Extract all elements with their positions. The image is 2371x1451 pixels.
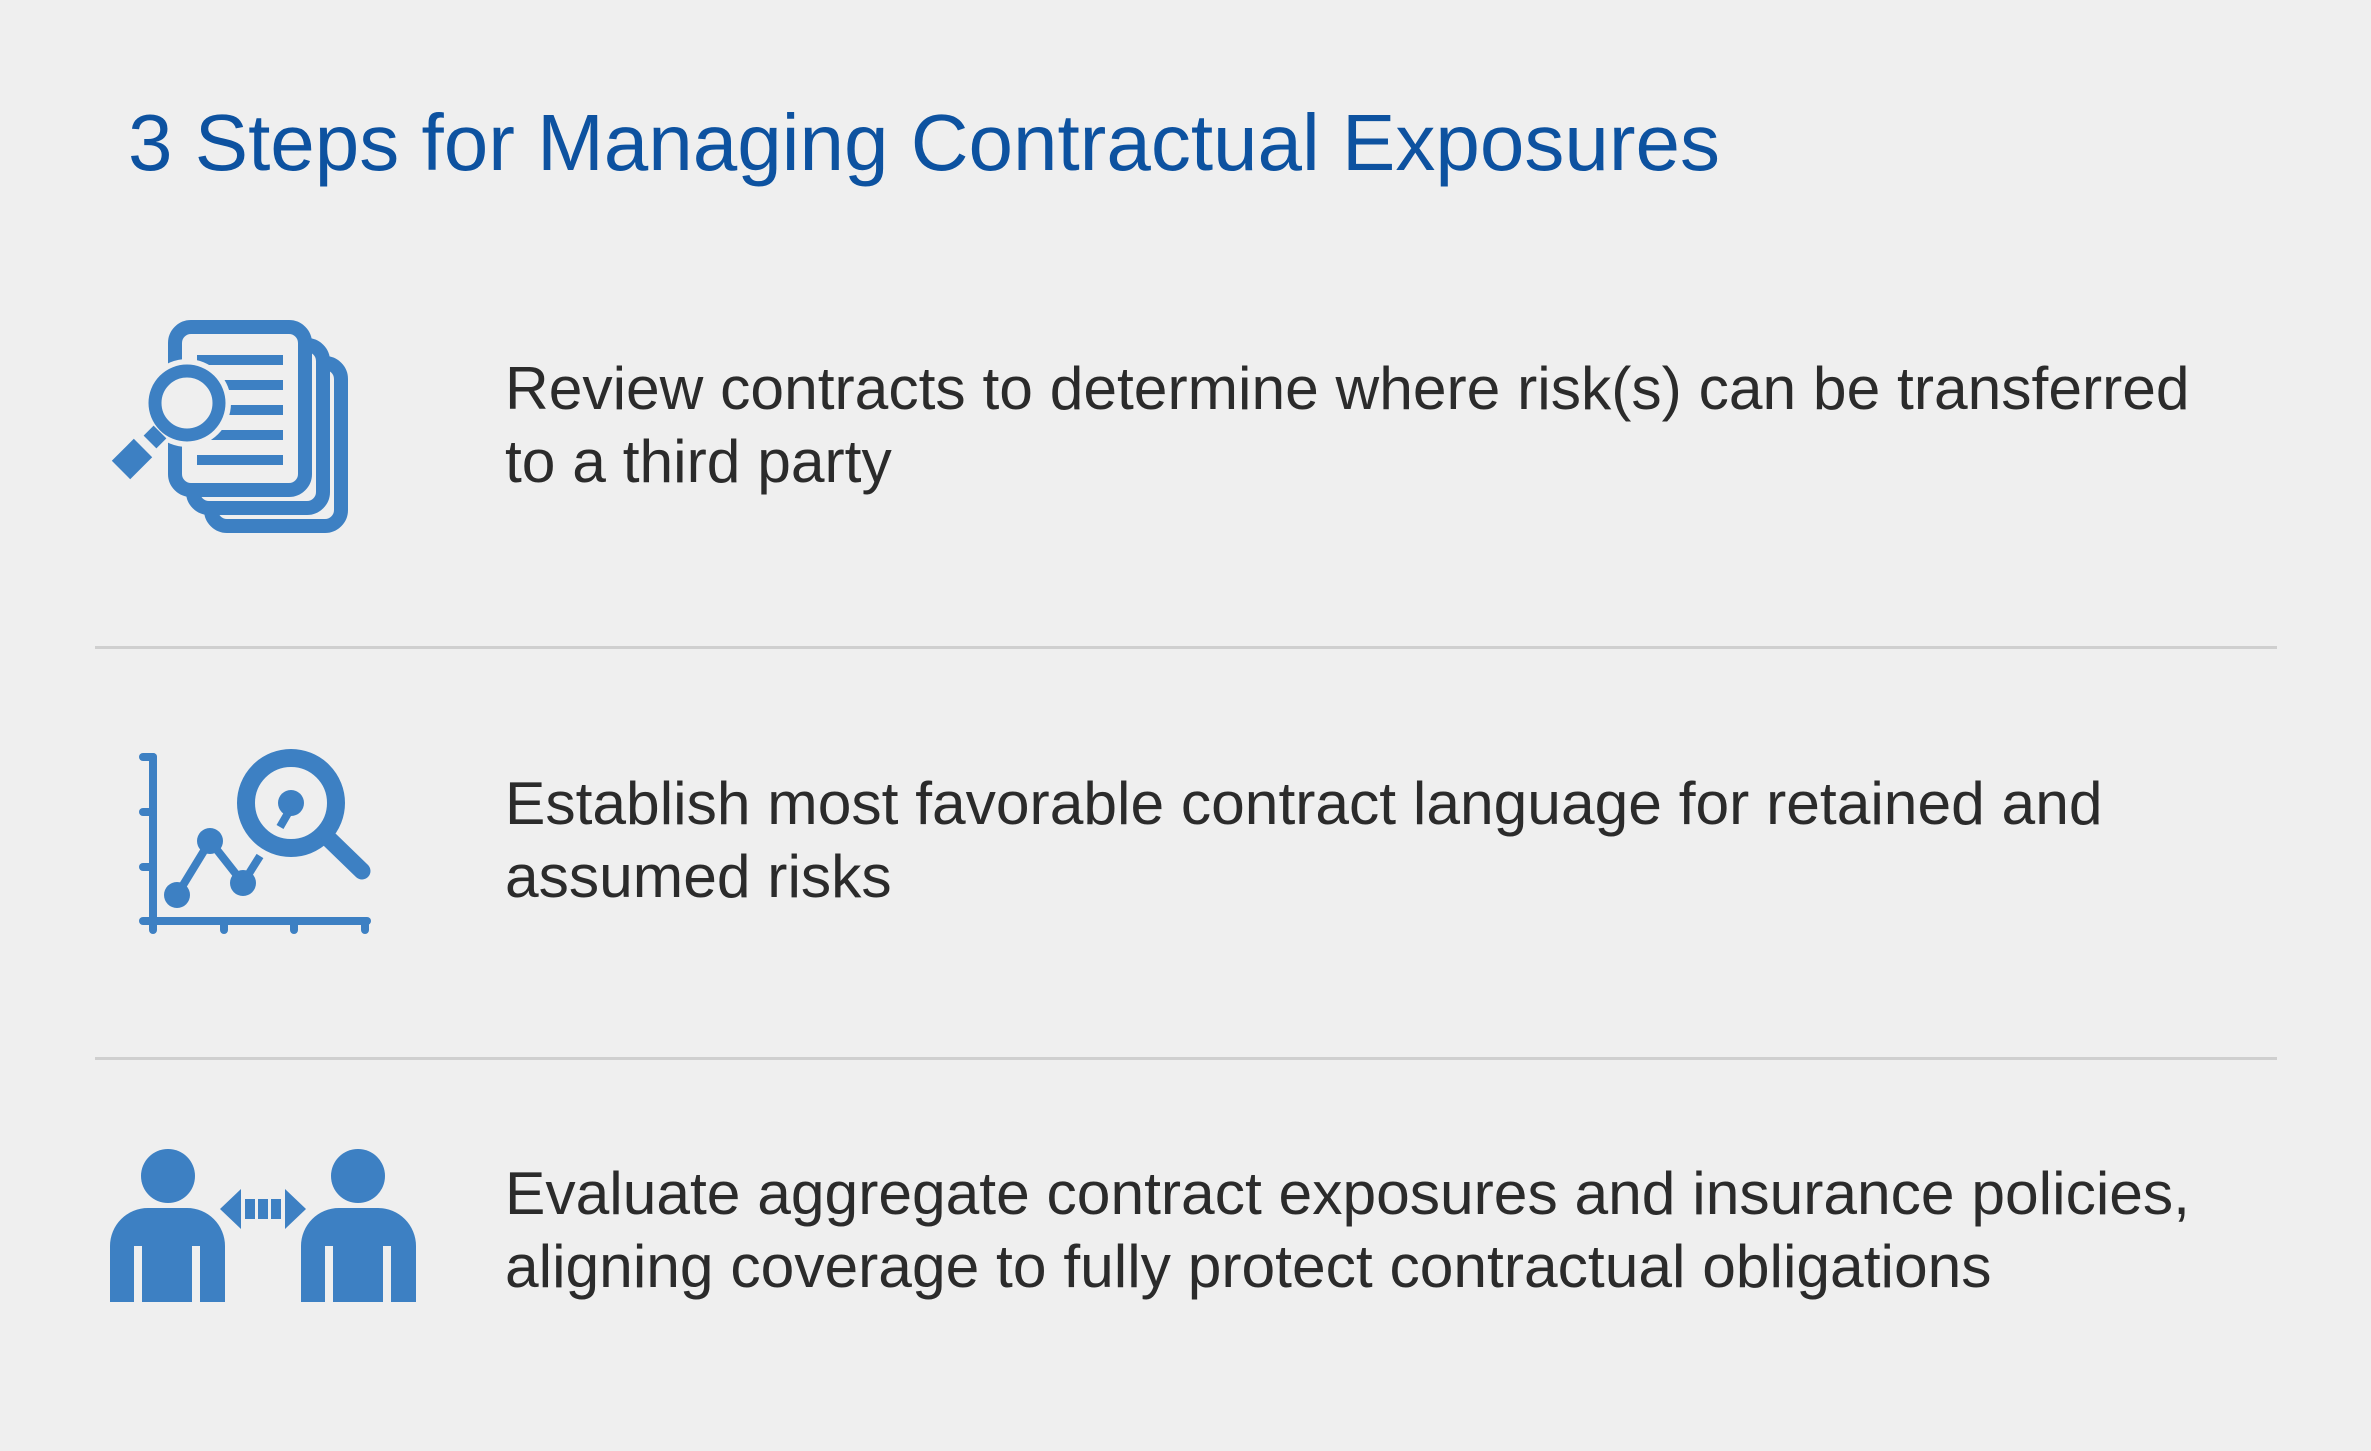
title: 3 Steps for Managing Contractual Exposures	[128, 98, 1720, 187]
text: step 3: aligning coverage to fully protect contractual obligations	[505, 1232, 1992, 1300]
text: step 1: to a third party	[505, 427, 892, 495]
divider	[95, 646, 2277, 649]
text: step 2	[505, 769, 2102, 910]
icon: two people with arrow	[110, 1149, 416, 1302]
divider	[95, 1057, 2277, 1060]
icon: chart with magnifier	[139, 749, 371, 934]
text: step 3	[505, 1159, 2190, 1300]
icon: documents with magnifier	[112, 320, 348, 533]
text: step 2: Establish most favorable contract language for retained and	[505, 769, 2102, 837]
text: step 2: assumed risks	[505, 842, 892, 910]
text: step 3: Evaluate aggregate contract exposures and insurance policies,	[505, 1159, 2190, 1227]
text: step 1: Review contracts to determine where risk(s) can be transferred	[505, 354, 2190, 422]
text: step 1	[505, 354, 2190, 495]
